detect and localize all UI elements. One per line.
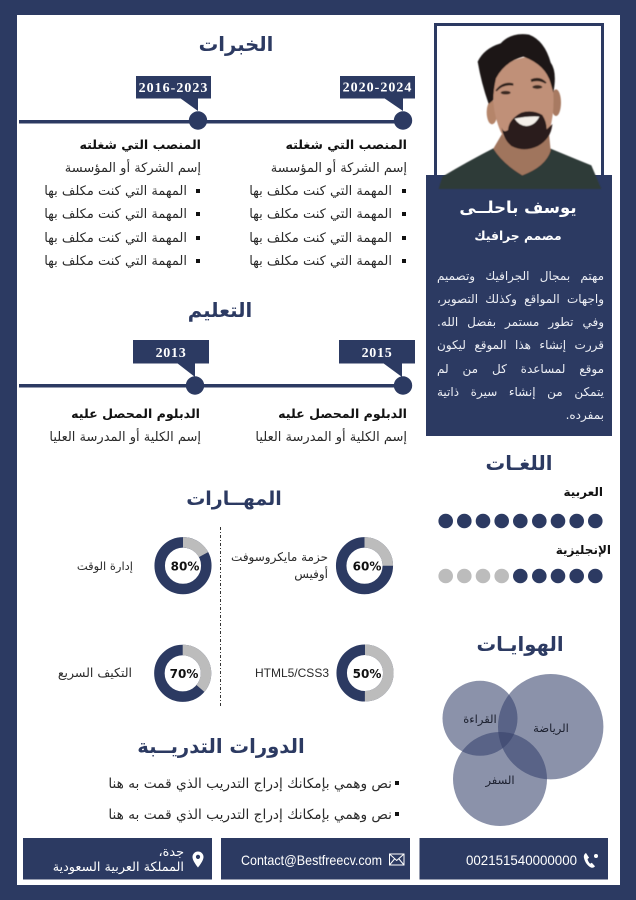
biography (437, 264, 604, 428)
heading: education: التعليم (188, 299, 252, 322)
biography: يتمكن من إنشاء سيرة ذاتية (437, 385, 604, 399)
contact bar: email: Contact@Bestfreecv.com (241, 852, 382, 868)
experience entry: right: المهمة التي كنت مكلف بها (249, 231, 392, 246)
heading: experience: الخبرات (199, 33, 273, 56)
experience entry: right: إسم الشركة أو المؤسسة (271, 159, 407, 176)
experience entry: left: المهمة التي كنت مكلف بها (44, 207, 187, 222)
skills chart (58, 527, 388, 706)
panel: profile sidebar (426, 24, 612, 436)
contact bar: phone (420, 838, 608, 880)
education entry: left (49, 406, 201, 445)
experience entry: left: المهمة التي كنت مكلف بها (44, 254, 187, 269)
languages: العربية (563, 485, 603, 499)
hobbies venn diagram: القراءة (463, 712, 497, 727)
donut: time management 80% (160, 542, 206, 589)
education entry: right (255, 406, 407, 445)
skill labels: إدارة الوقت (77, 559, 133, 574)
hobbies venn diagram (442, 674, 603, 826)
timeline: education: 2015 (362, 346, 392, 361)
experience entry: right (249, 137, 407, 269)
contact bar: address: جدة، (159, 845, 184, 860)
donut: office 60%: 60% (353, 560, 381, 574)
biography: واجهات المواقع وكذلك التصوير، (437, 292, 604, 306)
name: يوسف باحلــى (459, 198, 577, 218)
contact bar: address: المملكة العربية السعودية (53, 860, 184, 875)
contact bar: email (221, 838, 410, 880)
timeline: experience (19, 76, 415, 130)
biography: وفي تطور مستمر بفضل الله. (437, 315, 604, 329)
timeline: experience: 2016-2023 (139, 81, 208, 96)
icon: envelope (390, 854, 404, 865)
icon: phone (584, 853, 598, 868)
timeline: education (19, 340, 415, 395)
timeline: experience: 2020-2024 (343, 80, 412, 96)
portrait photo (438, 33, 602, 190)
skill labels: التكيف السريع (58, 665, 132, 681)
contact bar: phone: 002151540000000 (466, 852, 577, 868)
education entry: left: الدبلوم المحصل عليه (71, 406, 200, 422)
experience entry: right: المنصب التي شغلته (286, 137, 407, 152)
hobbies venn diagram: السفر (484, 773, 515, 788)
education entry: left: إسم الكلية أو المدرسة العليا (49, 428, 201, 445)
donut: html css 50% (342, 650, 388, 696)
training list (108, 776, 399, 823)
education entry: right: إسم الكلية أو المدرسة العليا (255, 428, 407, 445)
skill labels (58, 550, 329, 681)
skill labels: أوفيس (294, 566, 328, 582)
experience entry: left: إسم الشركة أو المؤسسة (65, 159, 201, 176)
dots: english (438, 569, 603, 583)
training list: نص وهمي بإمكانك إدراج التدريب الذي قمت به هنا (108, 776, 392, 792)
donut: adaptation 70% (159, 650, 206, 697)
heading: languages: اللغـات (486, 452, 552, 475)
experience entry: left: المهمة التي كنت مكلف بها (44, 231, 187, 246)
experience entry: left: المهمة التي كنت مكلف بها (44, 184, 187, 199)
timeline: education: 2013 (156, 346, 186, 361)
experience entry: left: المنصب التي شغلته (80, 137, 201, 152)
donut: html css 50%: 50% (353, 667, 381, 681)
heading: training courses: الدورات التدريــبة (137, 735, 305, 758)
training list: نص وهمي بإمكانك إدراج التدريب الذي قمت به هنا (108, 807, 392, 823)
languages: الإنجليزية (556, 543, 611, 557)
biography: موقع لمساعدة كل من لم (437, 362, 604, 376)
donut: time management 80%: 80% (171, 560, 199, 574)
languages (438, 485, 611, 583)
biography: بمفرده. (566, 408, 604, 422)
experience entry: left (44, 137, 201, 269)
heading: skills: المهــارات (186, 488, 282, 510)
contact bar: address (23, 838, 212, 880)
experience entry: right: المهمة التي كنت مكلف بها (249, 207, 392, 222)
skill labels: حزمة مايكروسوفت (231, 550, 328, 565)
job title: مصمم جرافيك (474, 229, 562, 243)
icon: map pin (192, 852, 204, 868)
biography: قررت إنشاء هذا الموقع ليكون (437, 338, 604, 352)
experience entry: right: المهمة التي كنت مكلف بها (249, 184, 392, 199)
experience entry: right: المهمة التي كنت مكلف بها (249, 254, 392, 269)
skill labels: HTML5/CSS3 (255, 666, 329, 680)
hobbies venn diagram: الرياضة (533, 721, 569, 736)
donut: adaptation 70%: 70% (170, 667, 198, 681)
biography: مهتم بمجال الجرافيك وتصميم (437, 268, 604, 282)
dots: arabic (438, 514, 603, 528)
heading: hobbies: الهوايـات (476, 633, 564, 656)
education entry: right: الدبلوم المحصل عليه (278, 406, 407, 422)
donut: office 60% (341, 542, 388, 589)
